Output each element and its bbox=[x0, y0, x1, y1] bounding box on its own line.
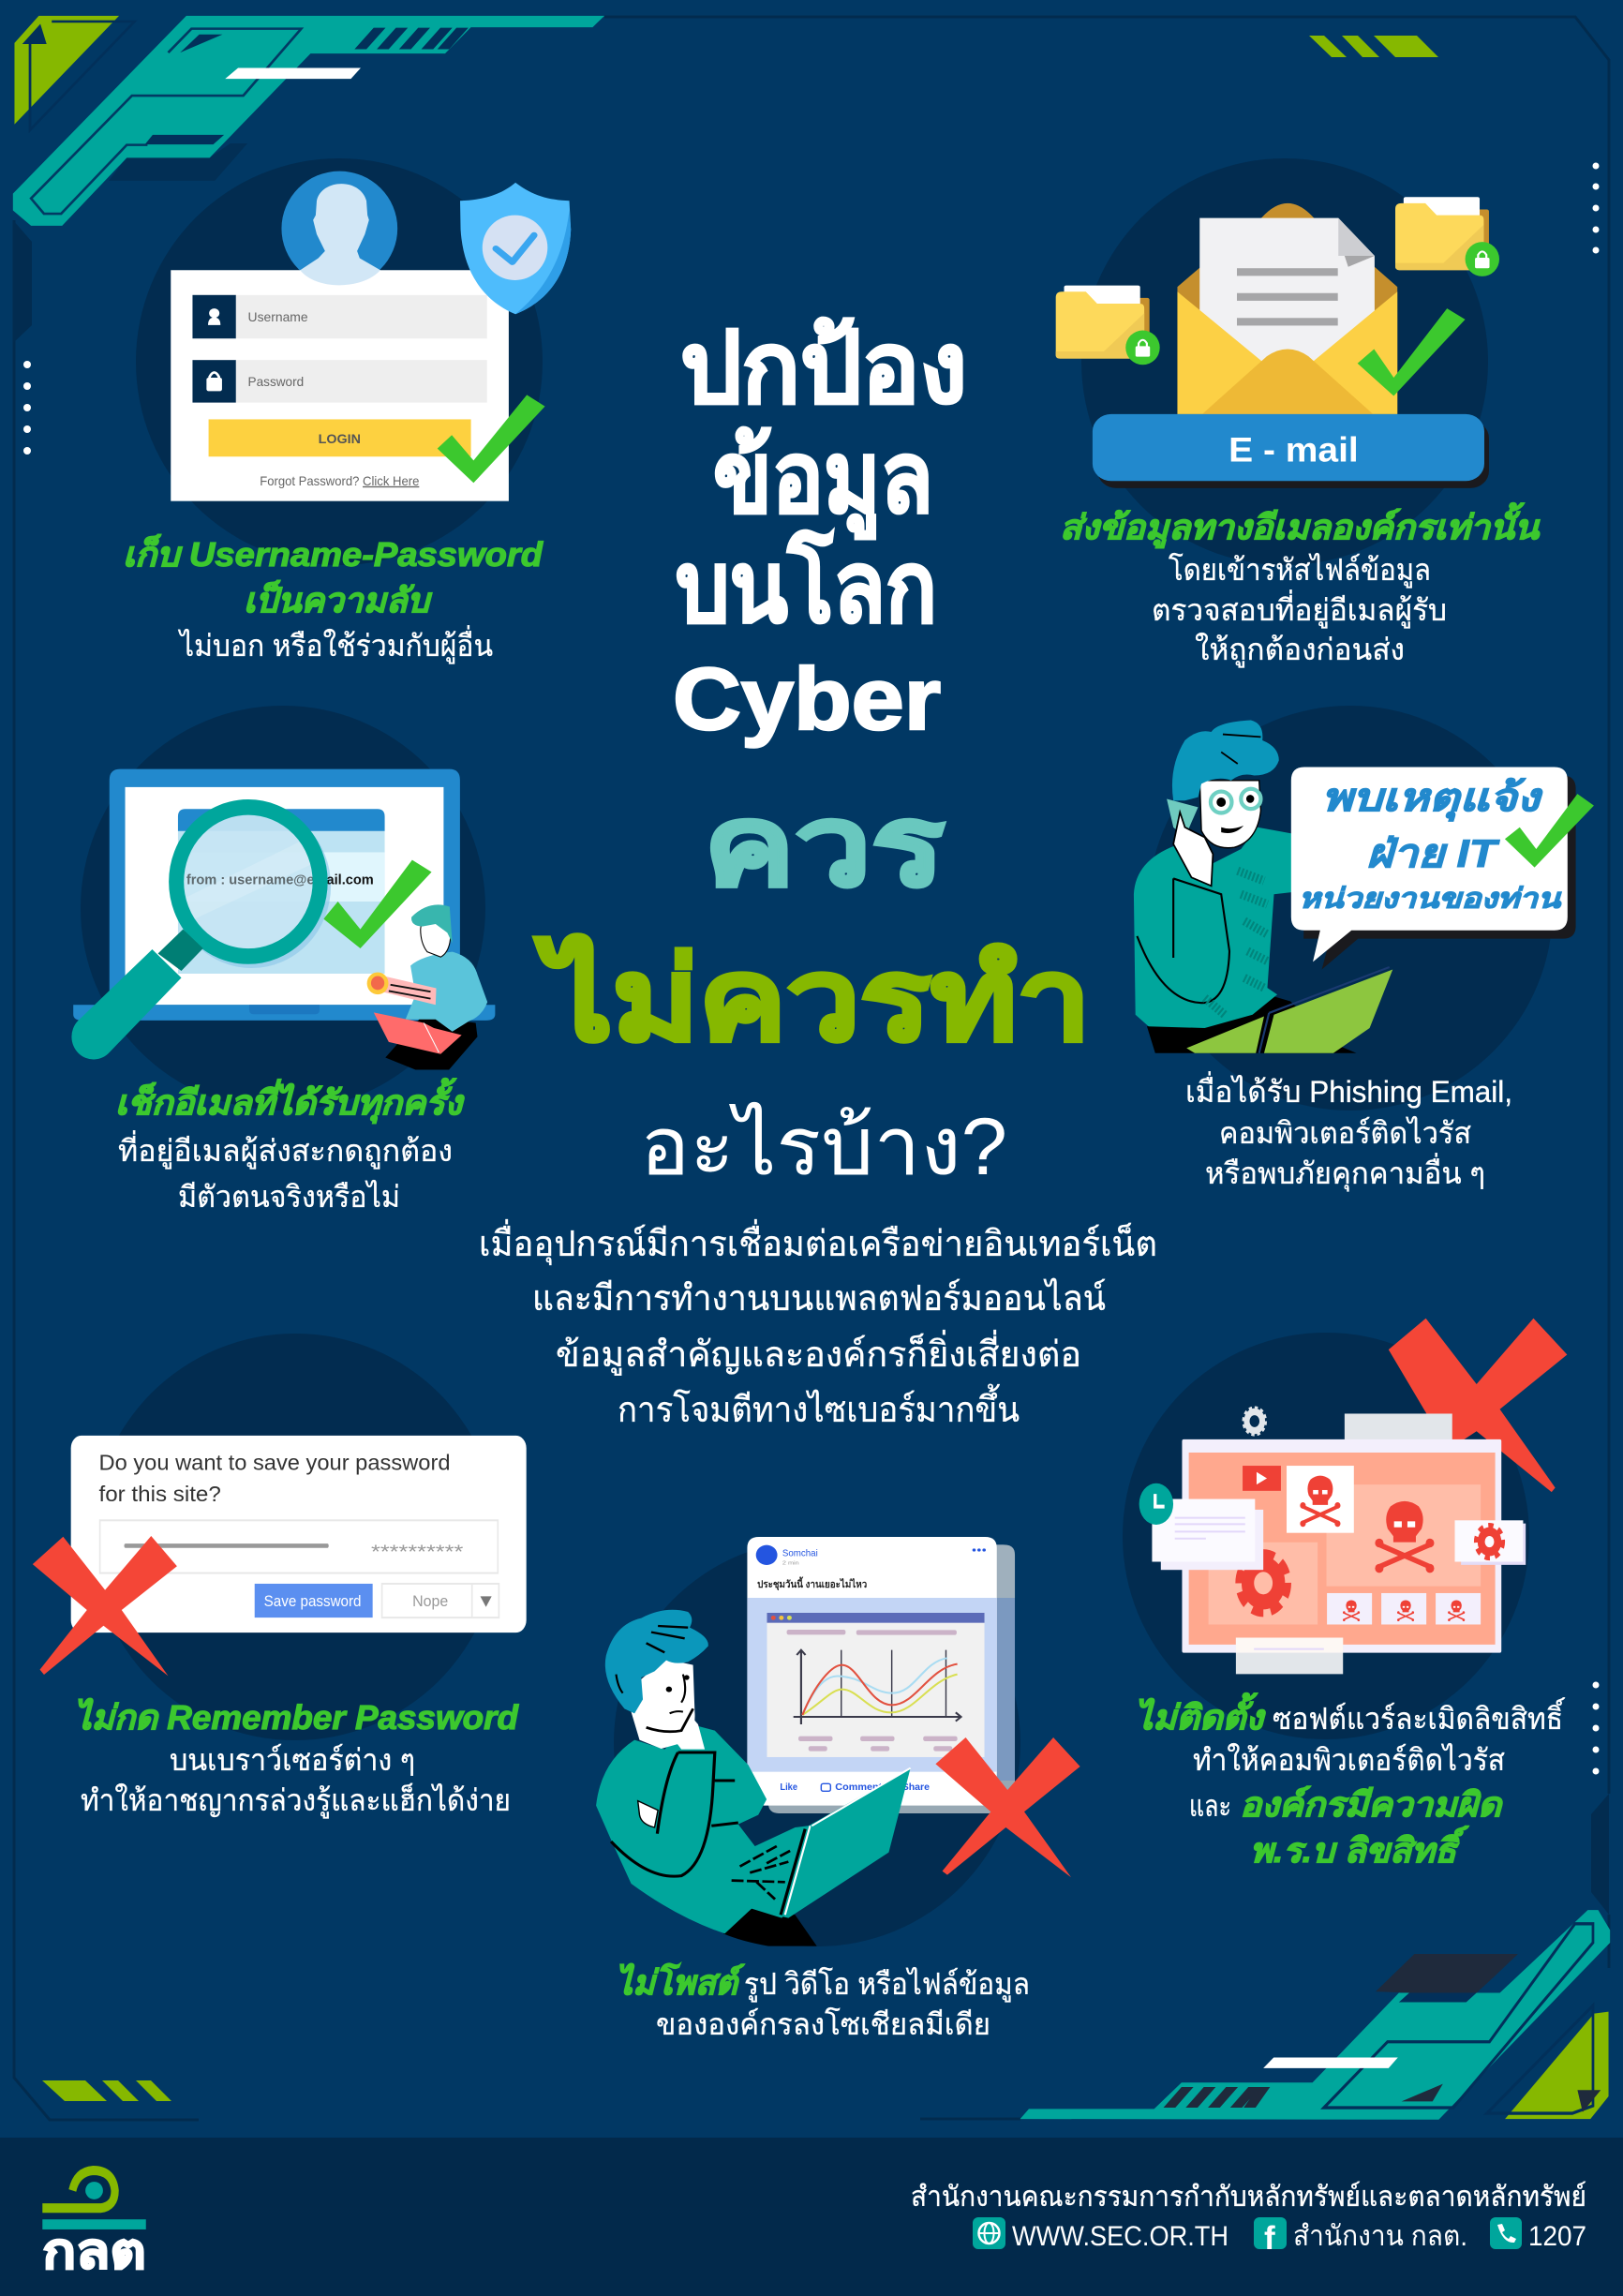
letter bbox=[1199, 218, 1375, 382]
heading: secret: เป็นความลับ bbox=[244, 580, 432, 619]
skull tile bbox=[1287, 1466, 1354, 1533]
title line 3: บนโลก bbox=[676, 529, 937, 643]
laptop bbox=[1186, 967, 1392, 1053]
chart screen bbox=[767, 1613, 985, 1757]
decoration: dots bottom right bbox=[1593, 1681, 1599, 1775]
text: no post line 2: ขององค์กรลงโซเชียลมีเดีย bbox=[656, 2007, 990, 2041]
post card bbox=[747, 1537, 997, 1806]
envelope front bbox=[1177, 291, 1397, 414]
login button bbox=[209, 419, 471, 456]
password field: ********** bbox=[371, 1541, 463, 1562]
bubble text 1: พบเหตุแจ้ง bbox=[1322, 776, 1543, 822]
post text: ประชุมวันนี้ งานเยอะไม่ไหว bbox=[757, 1575, 867, 1591]
text: phishing line 3: หรือพบภัยคุกคามอื่น ๆ bbox=[1205, 1153, 1485, 1192]
person body bbox=[1134, 827, 1357, 1053]
dialog bbox=[71, 1436, 527, 1633]
title line 1: ปกป้อง bbox=[680, 313, 967, 424]
post author: Somchai bbox=[782, 1549, 818, 1559]
avatar bbox=[281, 171, 397, 286]
password row bbox=[192, 360, 487, 403]
icon: check bbox=[1505, 794, 1594, 868]
dialog text 1: Do you want to save your password bbox=[98, 1451, 451, 1475]
laptop bbox=[73, 769, 495, 1021]
post actions: Like bbox=[780, 1782, 797, 1793]
icon: red x bbox=[1389, 1319, 1567, 1492]
text: no install line 2: ทำให้คอมพิวเตอร์ติดไวรัส bbox=[1193, 1743, 1505, 1777]
icon: check bbox=[1358, 308, 1466, 395]
text: do not share: ไม่บอก หรือใช้ร่วมกับผู้อื่น bbox=[177, 625, 493, 664]
text: phishing line 2: คอมพิวเตอร์ติดไวรัส bbox=[1219, 1116, 1471, 1150]
magnifier tint bbox=[182, 813, 315, 951]
paragraph: เมื่ออุปกรณ์มีการเชื่อมต่อเครือข่ายอินเทอร์เน็ต bbox=[479, 1219, 1157, 1265]
logo: กลต bbox=[42, 2225, 146, 2279]
text: no post line 1: รูป วิดีโอ หรือไฟล์ข้อมูล bbox=[744, 1967, 1030, 2003]
nope button: Nope bbox=[412, 1593, 448, 1610]
password row: Password bbox=[248, 376, 304, 390]
facebook name: สำนักงาน กลต. bbox=[1293, 2221, 1467, 2252]
note left bbox=[1152, 1499, 1263, 1570]
heading: no remember: ไม่กด Remember Password bbox=[74, 1698, 519, 1737]
decoration: bottom-right circuit bbox=[1020, 1910, 1610, 2120]
icon: magnifier shadow and lens bbox=[172, 804, 331, 968]
username row: Username bbox=[248, 310, 308, 325]
illustration: save password dialog bbox=[33, 1436, 527, 1676]
decoration: bottom-left stripes bbox=[42, 2080, 171, 2101]
illustration: social post and person bbox=[596, 1537, 1080, 1946]
dialog text 2: for this site? bbox=[98, 1482, 221, 1507]
footer organisation: สำนักงานคณะกรรมการกำกับหลักทรัพย์และตลาดหลักทรัพย์ bbox=[911, 2181, 1586, 2213]
icon: check bbox=[323, 860, 432, 948]
text: and: และ bbox=[1189, 1789, 1231, 1823]
icon: clock bbox=[1139, 1483, 1173, 1525]
post author bbox=[756, 1545, 818, 1566]
person head bbox=[1167, 721, 1279, 886]
top note bbox=[1345, 1413, 1452, 1450]
paragraph: การโจมตีทางไซเบอร์มากขึ้น bbox=[618, 1383, 1020, 1430]
login panel bbox=[171, 270, 509, 501]
decoration: top-right stripes bbox=[1309, 36, 1438, 57]
illustration: person and speech bubble bbox=[1134, 721, 1594, 1053]
text: check email line 1: ที่อยู่อีเมลผู้ส่งสะกดถูกต้อง bbox=[118, 1130, 453, 1170]
icon: shield bbox=[460, 183, 571, 314]
icon: gear white bbox=[1243, 1408, 1265, 1435]
paragraph bbox=[479, 1219, 1157, 1430]
decoration: dots top right bbox=[1593, 163, 1599, 253]
heading: check email: เช็กอีเมลที่ได้รับทุกครั้ง bbox=[115, 1078, 466, 1124]
illustration: laptop and magnifier bbox=[71, 769, 495, 1069]
email window bbox=[178, 809, 385, 974]
title: should: ควร bbox=[704, 783, 945, 909]
bubble text 2: ฝ่าย IT bbox=[1366, 831, 1500, 875]
side strip left bbox=[13, 220, 32, 343]
post actions: Share bbox=[902, 1782, 930, 1793]
laptop bbox=[732, 1768, 911, 1918]
title: what: อะไรบ้าง? bbox=[640, 1102, 1007, 1192]
title line 2: ข้อมูล bbox=[713, 423, 933, 540]
small person bbox=[367, 904, 487, 1069]
login button: LOGIN bbox=[319, 432, 361, 447]
icon: facebook: f bbox=[1264, 2220, 1275, 2257]
illustration: login card bbox=[171, 171, 571, 501]
title: should not: ไม่ควรทำ bbox=[534, 935, 1091, 1064]
decoration: top-left circuit bbox=[13, 16, 604, 226]
paragraph: และมีการทำงานบนแพลตฟอร์มออนไลน์ bbox=[532, 1278, 1106, 1319]
decoration: dots left bbox=[23, 361, 31, 455]
heading: keep username password: เก็บ Username-Password bbox=[123, 534, 543, 574]
icon: gear red bbox=[1240, 1554, 1288, 1612]
icon: facebook bbox=[1254, 2217, 1287, 2257]
envelope back bbox=[1177, 203, 1397, 414]
text: email line 2: ตรวจสอบที่อยู่อีเมลผู้รับ bbox=[1152, 589, 1447, 629]
side strip right bbox=[1591, 1794, 1609, 1915]
title line 4: Cyber bbox=[673, 649, 941, 748]
big skull bbox=[1375, 1501, 1434, 1573]
post author: 2 min bbox=[782, 1560, 799, 1566]
small skull tiles bbox=[1327, 1593, 1481, 1624]
logo bbox=[42, 2170, 146, 2279]
email button: E - mail bbox=[1228, 431, 1359, 470]
text: phishing line 1: เมื่อได้รับ Phishing Email, bbox=[1185, 1071, 1512, 1109]
icon: globe bbox=[973, 2217, 1005, 2249]
post dots bbox=[973, 1548, 986, 1552]
website: WWW.SEC.OR.TH bbox=[1012, 2221, 1228, 2252]
icon: phone bbox=[1490, 2217, 1522, 2249]
footer bbox=[0, 2138, 1623, 2296]
background circles bbox=[81, 158, 1553, 1946]
icon: check bbox=[438, 395, 545, 483]
heading: email: ส่งข้อมูลทางอีเมลองค์กรเท่านั้น bbox=[1060, 502, 1540, 548]
illustration: email bbox=[1056, 197, 1499, 488]
icon: folder left bbox=[1056, 286, 1160, 365]
forgot password: Forgot Password? Click Here bbox=[260, 474, 419, 489]
text: email line 1: โดยเข้ารหัสไฟล์ข้อมูล bbox=[1169, 553, 1431, 589]
heading: copyright act: พ.ร.บ ลิขสิทธิ์ bbox=[1250, 1826, 1469, 1870]
illustration: malware window bbox=[1139, 1319, 1567, 1674]
text: no remember line 2: ทำให้อาชญากรล่วงรู้และแฮ็กได้ง่าย bbox=[81, 1782, 511, 1819]
window bbox=[1182, 1439, 1501, 1653]
post actions bbox=[780, 1782, 930, 1793]
password field bbox=[100, 1520, 498, 1573]
nope button bbox=[382, 1584, 499, 1618]
text: no install line 1: ซอฟต์แวร์ละเมิดลิขสิทธิ์ bbox=[1273, 1697, 1566, 1736]
save button bbox=[255, 1584, 373, 1618]
bottom note bbox=[1236, 1638, 1343, 1674]
paragraph: ข้อมูลสำคัญและองค์กรก็ยิ่งเสี่ยงต่อ bbox=[556, 1330, 1081, 1376]
speech bubble bbox=[1291, 768, 1576, 970]
heading: no post: ไม่โพสต์ bbox=[616, 1962, 745, 2002]
email button bbox=[1093, 414, 1489, 488]
heading: offence: องค์กรมีความผิด bbox=[1240, 1785, 1504, 1824]
icon: magnifier bbox=[71, 807, 320, 1060]
email address text: from : username@email.com bbox=[186, 872, 374, 888]
gear card bbox=[1455, 1520, 1526, 1565]
avatar silhouette bbox=[300, 184, 380, 285]
icon: folder right bbox=[1395, 197, 1499, 276]
hotline: 1207 bbox=[1528, 2221, 1586, 2252]
icon: red x bbox=[935, 1737, 1080, 1877]
save button: Save password bbox=[264, 1593, 362, 1610]
video tile bbox=[1243, 1466, 1281, 1491]
icon: red x bbox=[33, 1536, 177, 1676]
bubble text 3: หน่วยงานของท่าน bbox=[1299, 884, 1561, 915]
thinking person bbox=[596, 1610, 817, 1946]
text: no remember line 1: บนเบราว์เซอร์ต่าง ๆ bbox=[170, 1743, 415, 1777]
post back card bbox=[768, 1544, 1015, 1813]
heading: no install: ไม่ติดตั้ง bbox=[1135, 1692, 1267, 1737]
text: check email line 2: มีตัวตนจริงหรือไม่ bbox=[178, 1180, 400, 1214]
username row bbox=[192, 295, 487, 338]
text: email line 3: ให้ถูกต้องก่อนส่ง bbox=[1195, 633, 1405, 668]
post actions: Comment bbox=[835, 1782, 883, 1793]
